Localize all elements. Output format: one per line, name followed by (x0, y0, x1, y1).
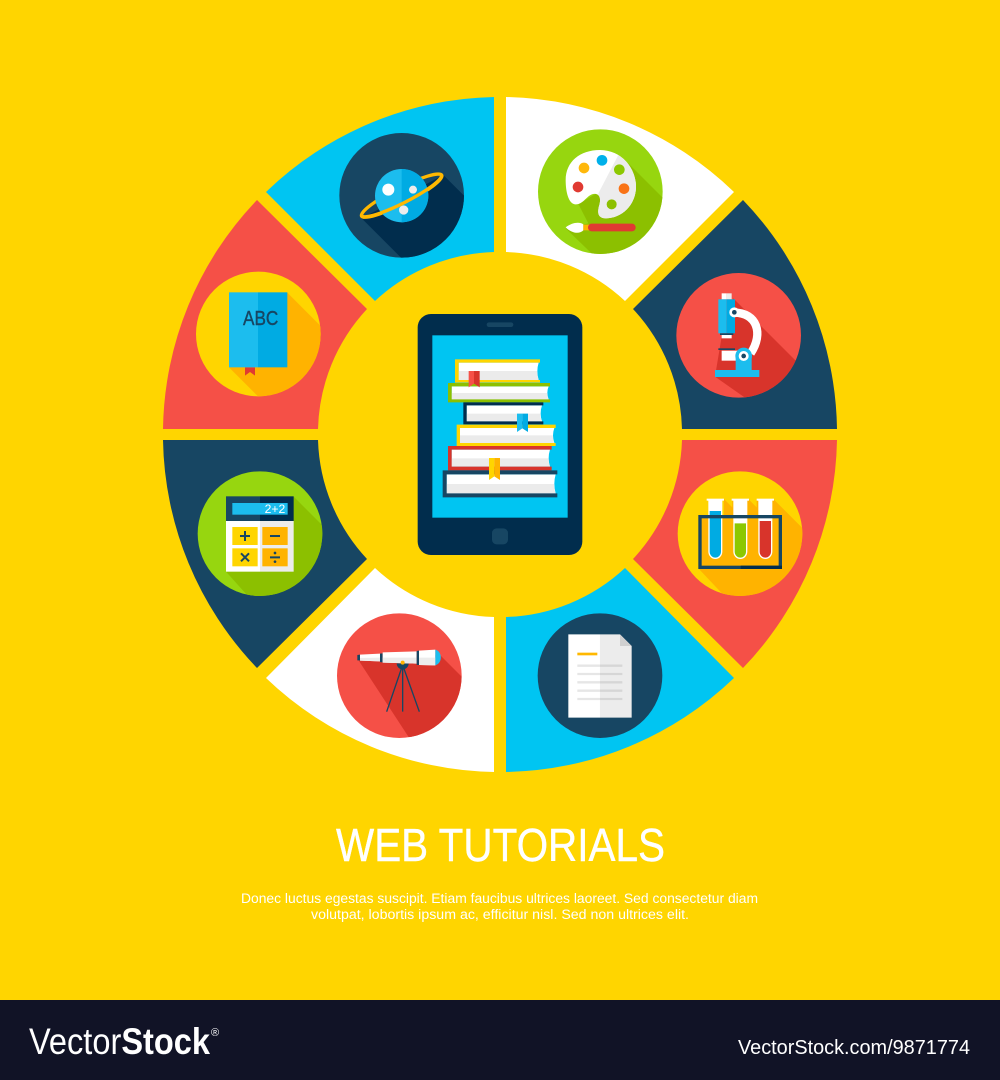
description text (241, 891, 758, 922)
icon: test tubes (678, 471, 805, 598)
icon: ABC book (196, 272, 323, 398)
icon: telescope (337, 613, 465, 742)
icon: ABC book: ABC (243, 308, 278, 330)
tablet with stack of books (418, 314, 582, 555)
description text: Donec luctus egestas suscipit. Etiam faucibus ultrices laoreet. Sed consectetur diam (241, 891, 758, 906)
ring segment: red lower-right (633, 440, 837, 668)
description text: volutpat, lobortis ipsum ac, efficitur nisl. Sed non ultrices elit. (311, 907, 689, 922)
ring segment: blue bottom-right (506, 568, 734, 772)
ring segment: navy upper-right (633, 200, 837, 429)
icon: calculator: 2+2 (265, 502, 286, 516)
footer image id: VectorStock.com/9871774 (738, 1037, 970, 1059)
icon: document (538, 613, 662, 738)
icon: microscope (676, 273, 802, 400)
title: WEB TUTORIALS (336, 819, 665, 871)
ring segment: blue top-left (266, 97, 494, 301)
ring segment: red upper-left (163, 200, 367, 429)
ring segment: white bottom-left (266, 568, 494, 772)
footer bar (0, 1000, 1000, 1080)
icon: calculator (198, 471, 325, 598)
icon: paint palette (538, 129, 665, 257)
ring segment: navy lower-left (163, 440, 367, 668)
icon: planet (339, 133, 467, 260)
footer logo: ® (211, 1027, 219, 1039)
footer logo: VectorStock (29, 1021, 210, 1062)
ring segment: white top-right (506, 97, 734, 301)
